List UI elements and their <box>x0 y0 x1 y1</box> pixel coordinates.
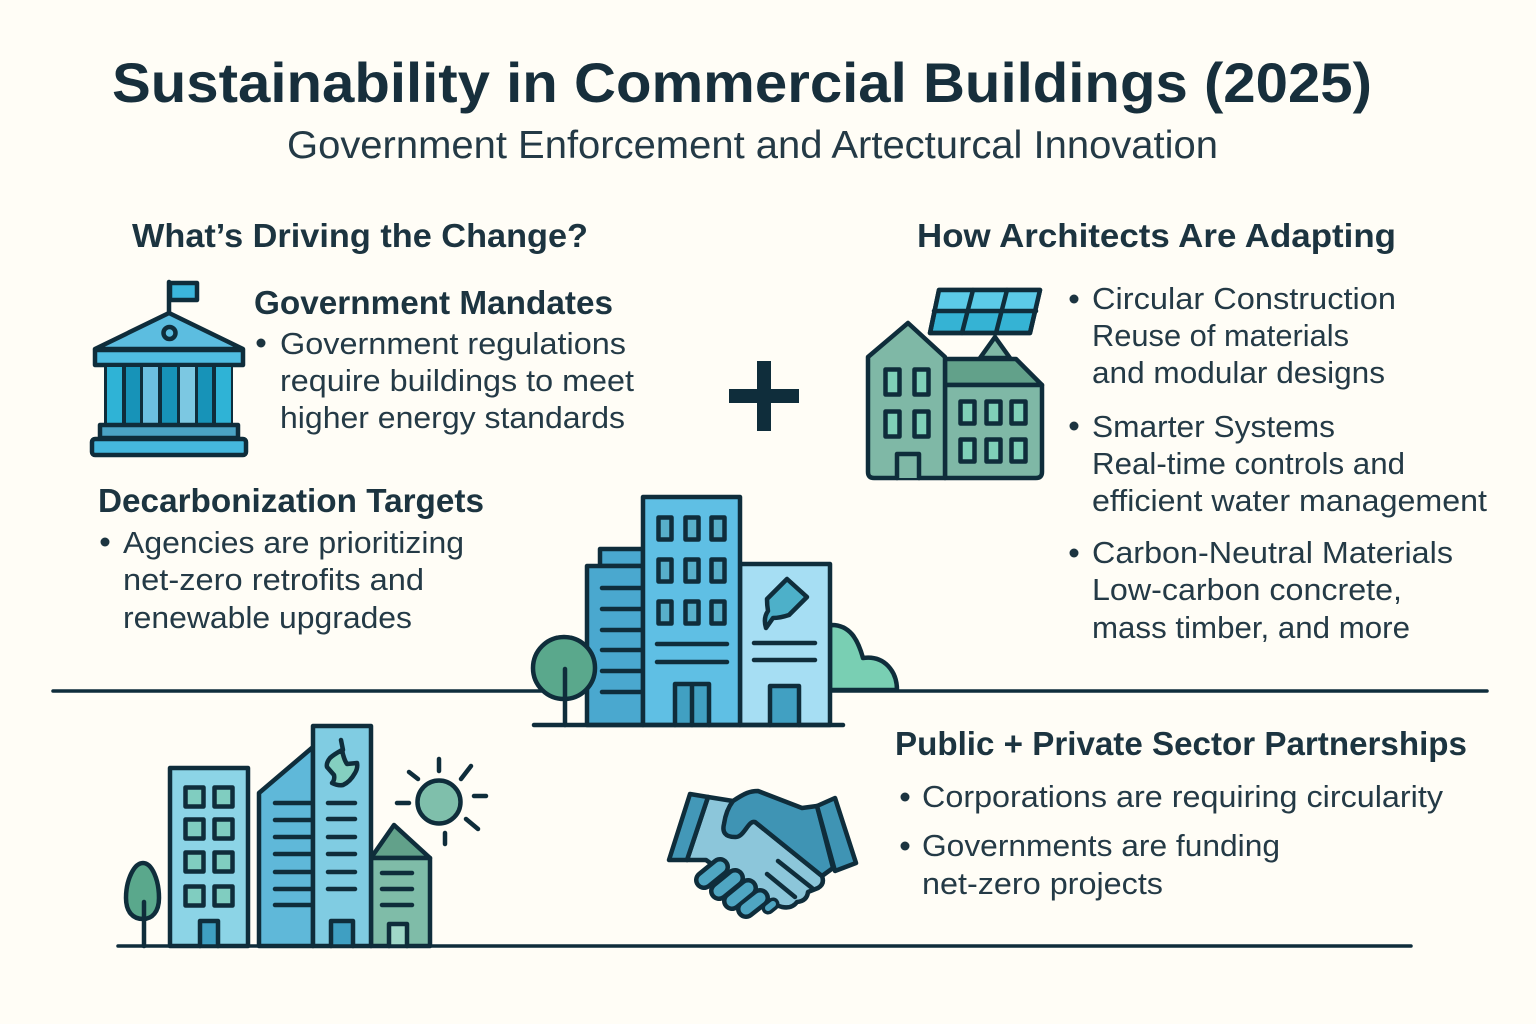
text block: smarter systems: efficient water management <box>1092 483 1487 518</box>
heading: partnerships: Public + Private Sector Partnerships <box>895 725 1467 762</box>
panel: what's driving the change <box>92 217 634 635</box>
icon: plus sign <box>729 361 799 431</box>
text block: carbon-neutral materials: mass timber, and more <box>1092 610 1410 645</box>
text block: smarter systems: Real-time controls and <box>1092 446 1405 481</box>
text block: government mandates: higher energy standards <box>280 400 625 435</box>
illustration: skyline with sun <box>126 726 486 946</box>
text block: carbon-neutral materials: Low-carbon concrete, <box>1092 572 1402 607</box>
text block: governments: net-zero projects <box>922 866 1163 901</box>
text block: smarter systems <box>1070 409 1487 518</box>
text block: corporations: Corporations are requiring circularity <box>922 779 1444 814</box>
panel: public and private partnerships <box>895 725 1467 901</box>
text block: circular construction <box>1070 281 1396 390</box>
text block: government mandates: Government Mandates <box>254 284 613 321</box>
heading: drivers: What’s Driving the Change? <box>132 217 588 254</box>
panel: how architects are adapting <box>868 217 1487 645</box>
text block: smarter systems: Smarter Systems <box>1092 409 1335 444</box>
bottom ground line <box>118 944 1411 948</box>
text block: government mandates <box>254 284 634 435</box>
text block: decarbonization targets: renewable upgrades <box>123 600 412 635</box>
text block: decarbonization targets <box>98 482 484 635</box>
text block: decarbonization targets: net-zero retrofits and <box>123 562 424 597</box>
icon: building with solar panel <box>868 290 1042 478</box>
text block: government mandates: require buildings to meet <box>280 363 634 398</box>
heading: architects: How Architects Are Adapting <box>917 217 1396 254</box>
illustration: central buildings <box>533 497 897 725</box>
text block: governments <box>900 828 1280 901</box>
icon: handshake <box>669 791 856 909</box>
subtitle: Government Enforcement and Artecturcal Innovation <box>287 124 1218 167</box>
text block: governments: Governments are funding <box>922 828 1280 863</box>
text block: circular construction: Reuse of materials <box>1092 318 1349 353</box>
text block: decarbonization targets: Agencies are prioritizing <box>123 525 464 560</box>
text block: circular construction: Circular Construction <box>1092 281 1396 316</box>
text block: circular construction: and modular designs <box>1092 355 1385 390</box>
text block: carbon-neutral materials: Carbon-Neutral Materials <box>1092 535 1453 570</box>
text block: carbon-neutral materials <box>1070 535 1453 645</box>
icon: government building <box>92 282 246 455</box>
title: Sustainability in Commercial Buildings (2025) <box>112 51 1372 114</box>
horizon line <box>53 689 1487 693</box>
text block: government mandates: Government regulations <box>280 326 626 361</box>
text block: decarbonization targets: Decarbonization Targets <box>98 482 484 519</box>
